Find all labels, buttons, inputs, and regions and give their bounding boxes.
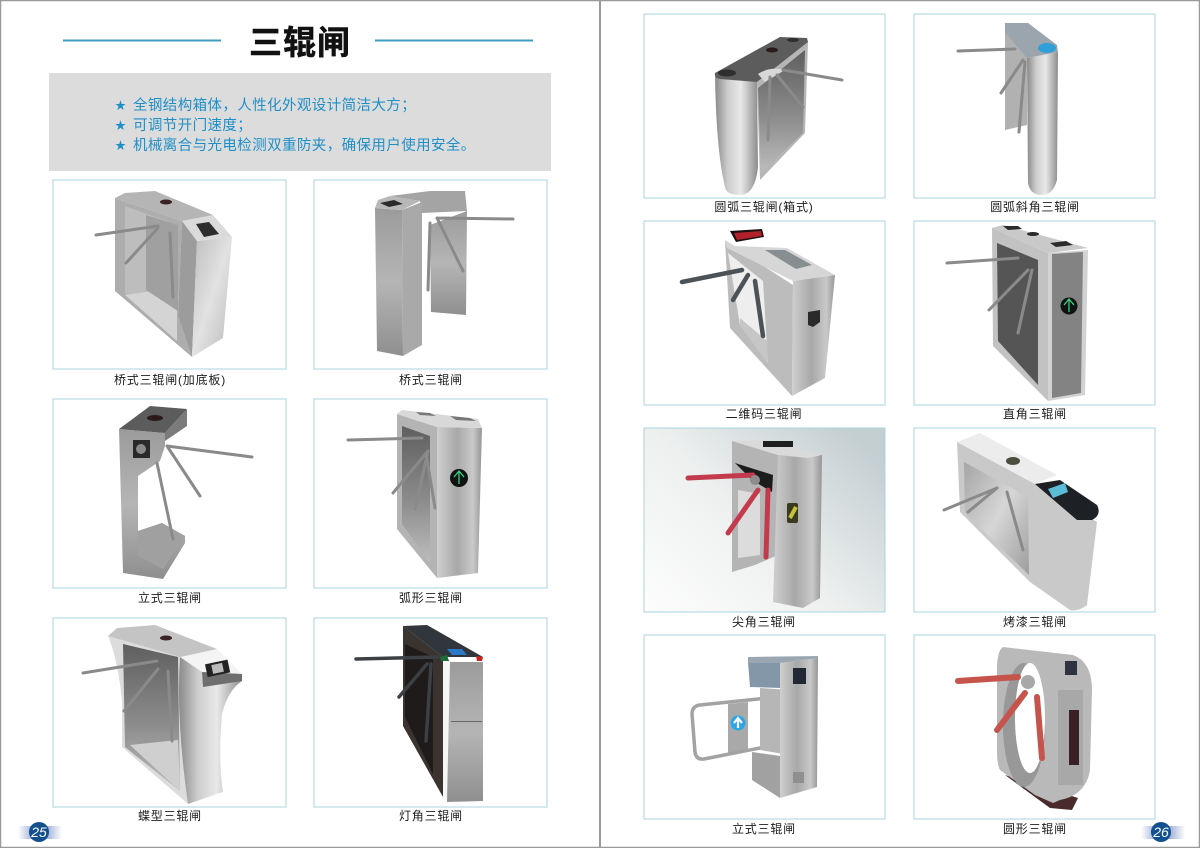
panel: bridge turnstile	[314, 180, 547, 387]
panel: butterfly turnstile	[53, 618, 286, 823]
panel: upright swing gate	[644, 635, 885, 836]
panel: bridge turnstile with base plate	[53, 180, 286, 387]
panel: upright turnstile	[53, 399, 286, 605]
panel: round turnstile: 圆形三辊闸	[1003, 822, 1067, 836]
panel: round turnstile	[914, 635, 1155, 836]
title: 三辊闸	[249, 24, 351, 61]
feature list panel: 可调节开门速度；	[133, 117, 252, 134]
panel: QR code turnstile: 二维码三辊闸	[726, 407, 802, 421]
page number 25	[18, 822, 62, 842]
panel: right angle turnstile	[914, 221, 1155, 421]
panel: lit corner turnstile	[314, 618, 547, 823]
panel: QR code turnstile	[644, 221, 885, 421]
panel: upright swing gate: 立式三辊闸	[732, 821, 796, 836]
panel: bridge turnstile: 桥式三辊闸	[399, 373, 463, 387]
feature list panel: ★	[115, 100, 126, 112]
panel: sharp corner turnstile	[644, 428, 885, 629]
panel: arc box turnstile	[644, 14, 885, 214]
panel: arc bevel turnstile: 圆弧斜角三辊闸	[990, 200, 1080, 214]
feature list panel: 机械离合与光电检测双重防夹，确保用户使用安全。	[133, 136, 476, 154]
panel: sharp corner turnstile: 尖角三辊闸	[732, 615, 796, 629]
panel: arc turnstile	[314, 399, 547, 605]
panel: arc box turnstile: 圆弧三辊闸(箱式)	[714, 199, 814, 214]
panel: bridge turnstile with base plate: 桥式三辊闸(加底板)	[114, 372, 226, 387]
feature list panel: 全钢结构箱体，人性化外观设计简洁大方；	[133, 96, 416, 114]
feature list panel: ★	[115, 140, 126, 152]
panel: arc turnstile: 弧形三辊闸	[399, 591, 463, 605]
panel: right angle turnstile: 直角三辊闸	[1003, 407, 1067, 421]
feature list panel: ★	[115, 120, 126, 132]
page number 26: 26	[1152, 824, 1169, 840]
panel: lit corner turnstile: 灯角三辊闸	[399, 809, 463, 823]
page number 26	[1141, 822, 1185, 842]
page number 25: 25	[30, 824, 47, 840]
panel: butterfly turnstile: 蝶型三辊闸	[138, 808, 202, 823]
panel: painted turnstile	[914, 428, 1155, 629]
panel: arc bevel turnstile	[914, 14, 1155, 214]
feature list panel	[49, 73, 551, 171]
panel: painted turnstile: 烤漆三辊闸	[1003, 614, 1067, 629]
panel: upright turnstile: 立式三辊闸	[138, 590, 202, 605]
